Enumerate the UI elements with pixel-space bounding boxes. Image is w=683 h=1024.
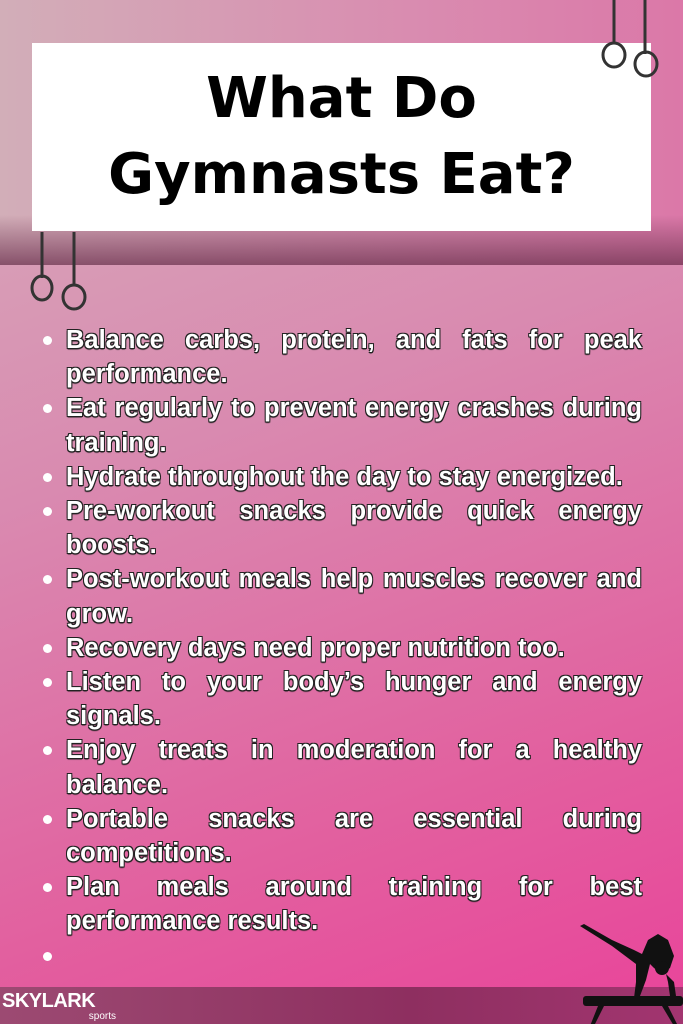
bullet list: grow.: [66, 600, 133, 628]
bullet list: Recovery days need proper nutrition too.: [66, 634, 565, 662]
logo: sports: [89, 1011, 116, 1022]
icon: rings left: [30, 232, 86, 310]
logo: [2, 990, 116, 1022]
bullet list: competitions.: [66, 839, 232, 867]
title: Gymnasts Eat?: [108, 142, 575, 207]
bullet list: balance.: [66, 771, 168, 799]
title: What Do: [206, 66, 477, 131]
icon: rings top right: [602, 0, 658, 78]
bullet list: Balance carbs, protein, and fats for peak: [66, 326, 642, 354]
bullet list: [43, 326, 643, 961]
title: [32, 43, 651, 231]
bullet list: Portable snacks are essential during: [66, 805, 642, 833]
bullet list: signals.: [66, 702, 161, 730]
logo: SKYLARK: [2, 990, 95, 1012]
bullet list: performance.: [66, 360, 228, 388]
bullet list: performance results.: [66, 907, 318, 935]
bullet list: Hydrate throughout the day to stay energized.: [66, 463, 623, 491]
bullet list: Eat regularly to prevent energy crashes during: [66, 394, 642, 422]
bullet list: Pre-workout snacks provide quick energy: [66, 497, 642, 525]
bullet list: Plan meals around training for best: [66, 873, 642, 901]
bullet list: Enjoy treats in moderation for a healthy: [66, 736, 642, 764]
bullet list: boosts.: [66, 531, 157, 559]
bullet list: training.: [66, 429, 167, 457]
bullet list: Listen to your body’s hunger and energy: [66, 668, 642, 696]
icon: gymnast on beam: [580, 924, 683, 1024]
bullet list: Post-workout meals help muscles recover and: [66, 565, 642, 593]
